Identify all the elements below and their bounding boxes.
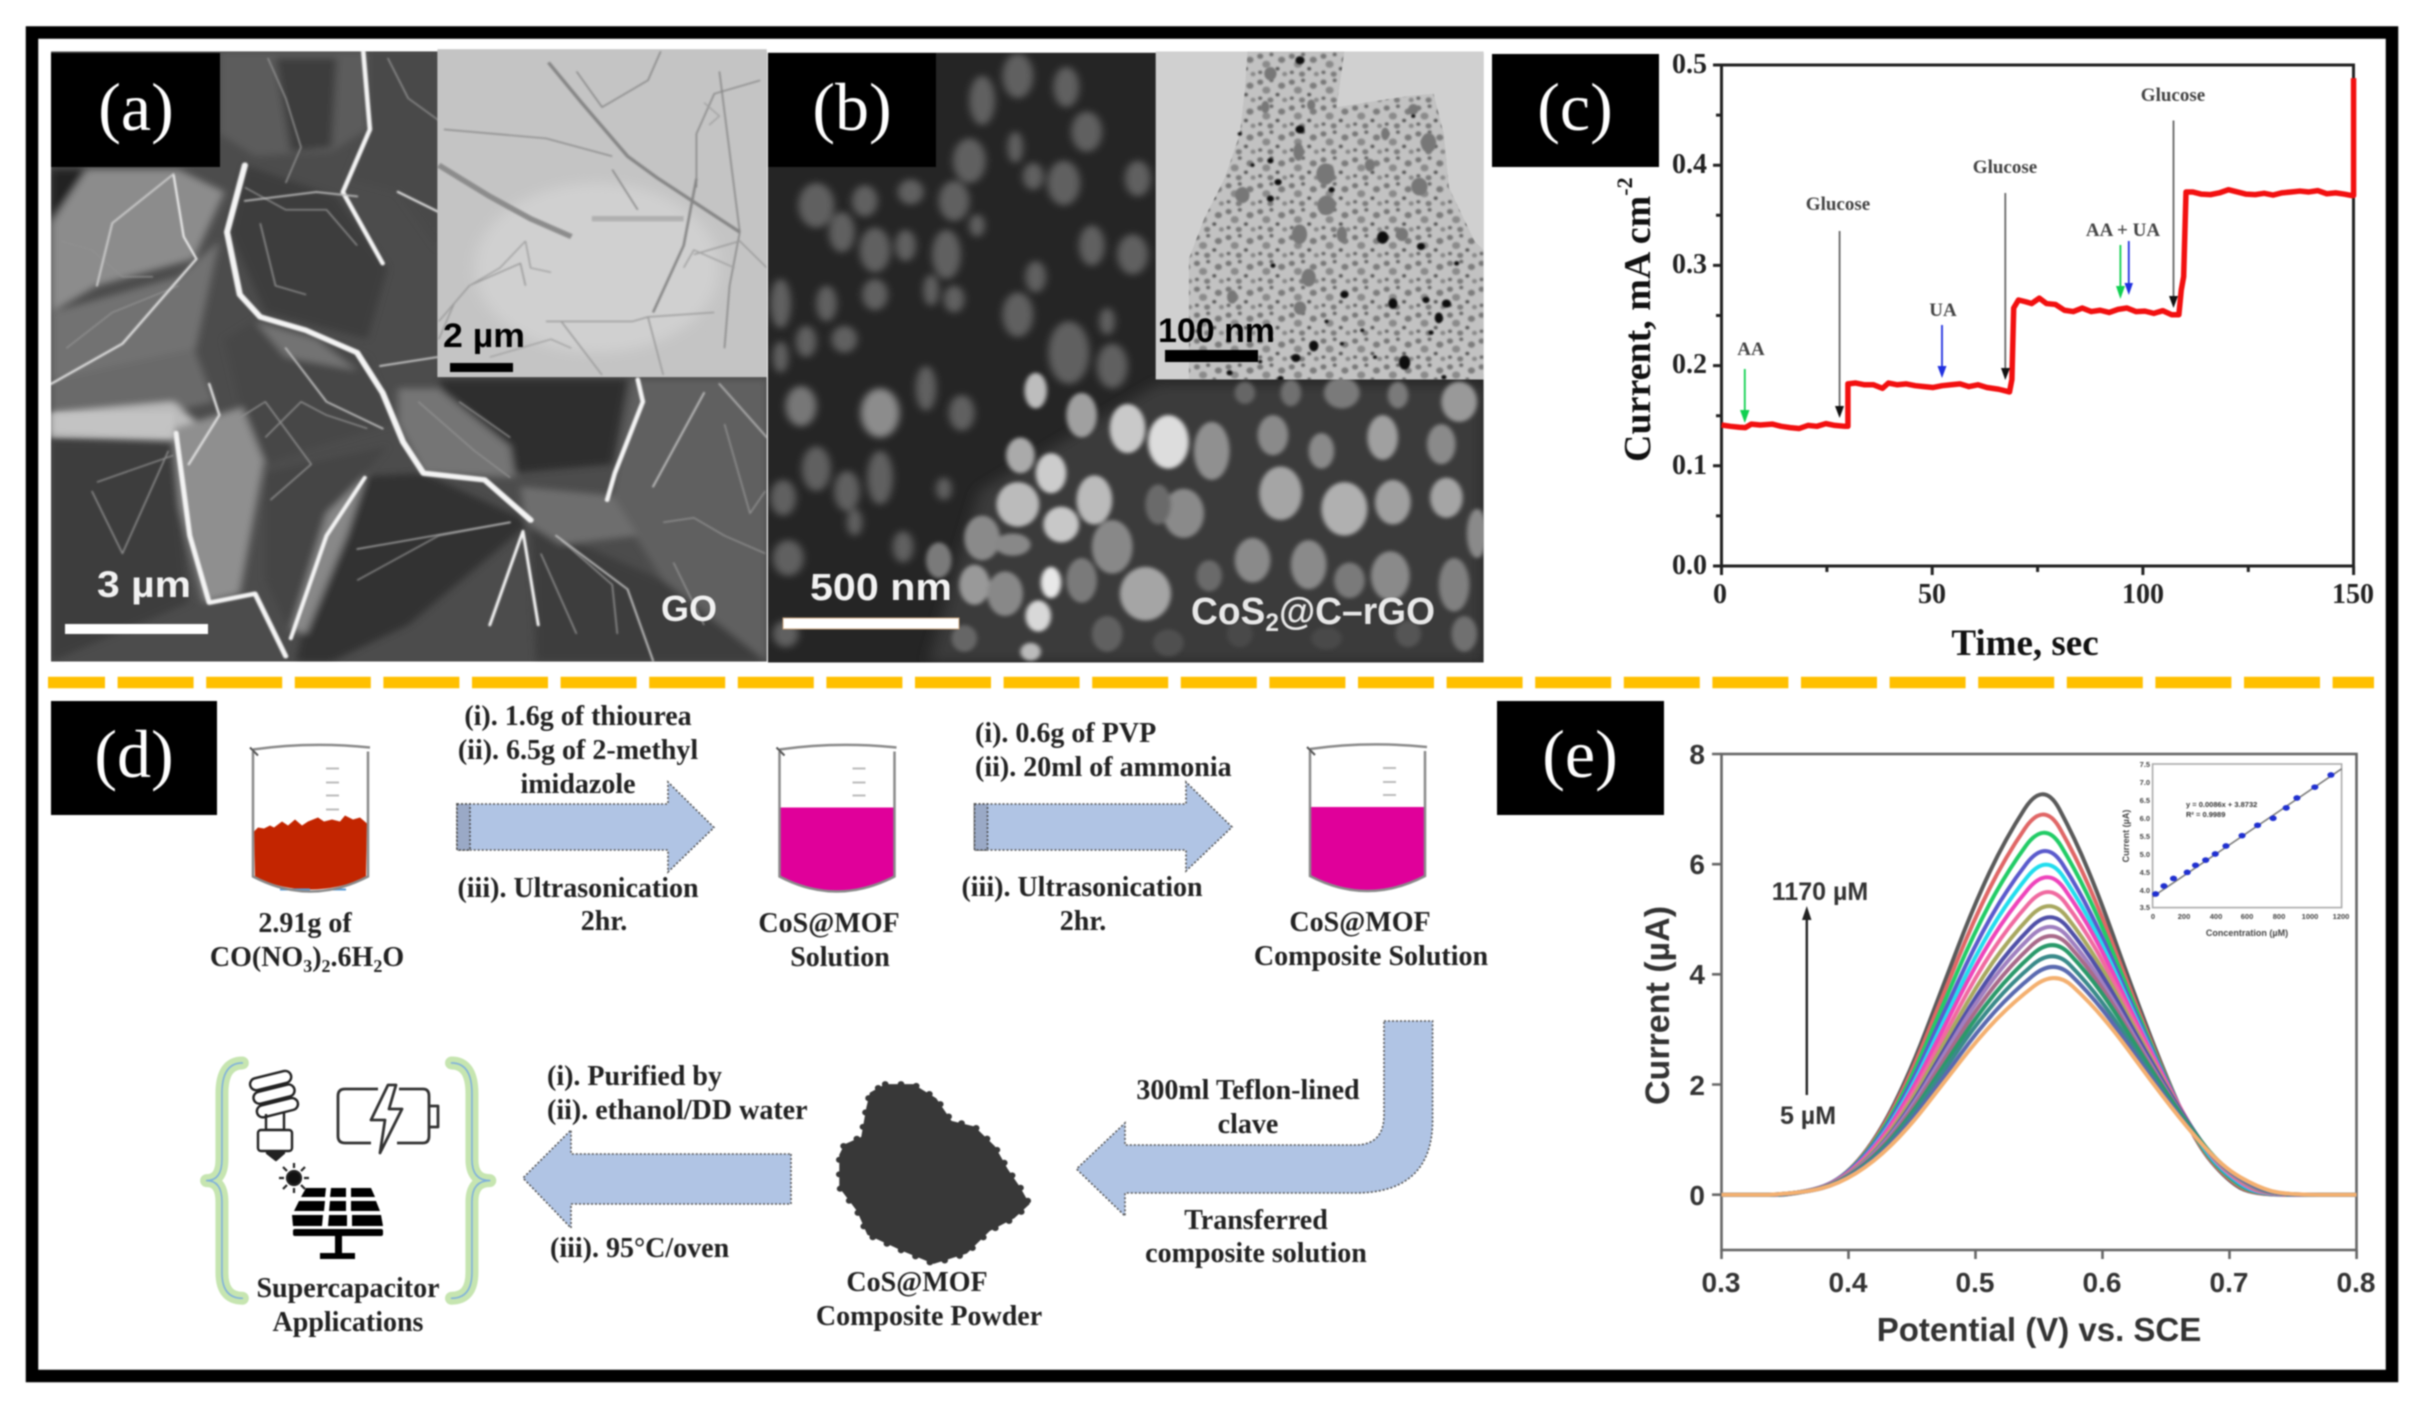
panel (d): synthesis flow diagram (51, 701, 1488, 1338)
x axis tick labels: 0.7 (2210, 1267, 2248, 1298)
y axis tick labels: 0.4 (1672, 149, 1707, 180)
purification text: (ii). ethanol/DD water (547, 1095, 808, 1126)
clave text: clave (1218, 1109, 1278, 1140)
y axis tick labels: 8 (1689, 739, 1705, 770)
beaker 1 caption: 2 (322, 956, 331, 976)
y axis tick labels: 0.0 (1672, 550, 1707, 581)
inset axis titles: Concentration (µM) (2206, 928, 2288, 938)
label (d): (d) (94, 716, 174, 792)
applications caption: Supercapacitor (256, 1273, 440, 1304)
SEM image of CoS2 particles (768, 53, 1487, 662)
inset x tick labels: 0 (2151, 912, 2155, 921)
step 1 reagents text: (ii). 6.5g of 2-methyl (458, 735, 698, 766)
inset x tick labels: 1200 (2333, 912, 2349, 921)
x axis tick labels: 0.6 (2083, 1267, 2121, 1298)
label (e): (e) (1542, 716, 1618, 792)
step 2 conditions text: 2hr. (1060, 906, 1106, 937)
beaker 2 caption: CoS@MOF (758, 908, 900, 939)
beaker 1 caption: 2 (373, 956, 382, 976)
inset y tick labels: 7.0 (2140, 778, 2150, 787)
y axis tick labels: 4 (1689, 959, 1705, 990)
beaker 2 with magenta solution (776, 745, 896, 892)
y axis tick labels: 0.5 (1672, 49, 1707, 80)
y axis title: Current, mA cm (1617, 196, 1659, 462)
bent arrow: transfer to clave (1076, 1021, 1433, 1216)
clave text: 300ml Teflon-lined (1136, 1075, 1360, 1106)
label (a): (a) (98, 69, 174, 145)
annotation labels: Glucose (2141, 85, 2205, 106)
concentration arrow and labels: 5 µM (1780, 1102, 1836, 1130)
x axis title: Potential (V) vs. SCE (1877, 1311, 2201, 1348)
beaker 1 with red cobalt nitrate (250, 745, 370, 892)
applications group (207, 1063, 490, 1338)
step 1 conditions text: 2hr. (581, 906, 627, 937)
beaker 3 with magenta solution (1307, 744, 1427, 891)
x axis tick labels: 0.4 (1829, 1267, 1868, 1298)
label (a) (51, 53, 220, 167)
concentration arrow and labels (1772, 878, 1868, 1130)
annotation labels: Glucose (1806, 194, 1870, 215)
step 2 reagents text: (i). 0.6g of PVP (975, 718, 1156, 749)
inset y tick labels: 6.0 (2140, 814, 2150, 823)
beaker 1 caption: 3 (303, 956, 312, 976)
arrow: step 2 (974, 782, 1232, 871)
axes and ticks (1712, 754, 2357, 1259)
beaker 1 caption: 2.91g of (258, 908, 352, 939)
inset trend line and points (2152, 769, 2342, 897)
inset x tick labels (2151, 912, 2349, 921)
annotation labels: AA + UA (2086, 220, 2160, 241)
step 1 conditions text (457, 873, 699, 937)
x axis title: Time, sec (1951, 623, 2099, 664)
panel (a): GO electron micrographs (51, 49, 767, 662)
step 1 reagents text (458, 701, 698, 800)
inset calibration plot (2121, 760, 2349, 938)
panel (b): CoS2@C-rGO electron micrographs (768, 51, 1487, 662)
inset x tick labels: 400 (2210, 912, 2222, 921)
inset y tick labels (2140, 760, 2150, 912)
y axis title: -2 (1612, 177, 1637, 196)
scale bar 500 nm (783, 567, 959, 629)
inset y tick labels: 6.5 (2140, 796, 2150, 805)
inset y tick labels: 4.5 (2140, 868, 2150, 877)
inset x tick labels: 200 (2178, 912, 2190, 921)
purification text (547, 1061, 808, 1126)
icon: battery (338, 1085, 438, 1153)
scale bar 3 um: 3 µm (97, 564, 191, 605)
scale bar 2 um: 2 µm (443, 317, 525, 355)
GO label: GO (661, 588, 717, 629)
applications caption: Applications (273, 1307, 424, 1338)
scale bar 3 um (65, 564, 208, 634)
inset x tick labels: 800 (2273, 912, 2285, 921)
clave text (1136, 1075, 1360, 1140)
powder caption (816, 1267, 1042, 1332)
x axis tick labels: 100 (2122, 579, 2164, 610)
transferred text (1145, 1205, 1367, 1269)
y axis tick labels: 0.3 (1672, 249, 1707, 280)
CoS2@C-rGO label: @C–rGO (1279, 591, 1435, 633)
beaker 3 caption: CoS@MOF (1289, 907, 1431, 938)
applications caption (256, 1273, 440, 1338)
step 1 conditions text: (iii). Ultrasonication (457, 873, 699, 904)
oven text: (iii). 95°C/oven (550, 1233, 730, 1264)
transferred text: Transferred (1184, 1205, 1328, 1236)
y axis title: Current (µA) (1639, 906, 1677, 1105)
beaker 1 caption: .6H (331, 942, 374, 973)
y axis tick labels: 0 (1689, 1180, 1705, 1211)
annotation labels: UA (1929, 300, 1957, 321)
panel (c): amperometric response chart (1492, 49, 2374, 664)
panel (e): voltammetry chart (1497, 701, 2415, 1348)
beaker 3 caption (1254, 907, 1488, 972)
beaker 1 caption (210, 908, 404, 976)
SEM image of GO sheets (51, 51, 767, 662)
inset y title: Current (µA) (2121, 810, 2131, 862)
curly braces (207, 1063, 490, 1298)
x axis tick labels: 150 (2332, 579, 2374, 610)
step 2 reagents text (975, 718, 1232, 783)
CoS2@C-rGO label: 2 (1265, 609, 1279, 637)
label (b) (768, 53, 936, 167)
label (e) (1497, 701, 1664, 815)
label (c): (c) (1537, 69, 1613, 145)
y axis tick labels (1672, 49, 1707, 581)
step 1 reagents text: (i). 1.6g of thiourea (464, 701, 692, 732)
powder caption: CoS@MOF (846, 1267, 988, 1298)
x axis tick labels: 0 (1713, 579, 1727, 610)
y axis tick labels: 0.1 (1672, 450, 1707, 481)
y axis tick labels (1689, 739, 1705, 1211)
step 1 reagents text: imidazole (520, 769, 636, 800)
step 2 conditions text: (iii). Ultrasonication (961, 872, 1203, 903)
beaker 1 caption: O (382, 942, 404, 973)
inset y tick labels: 5.5 (2140, 832, 2150, 841)
TEM inset of nanoparticles (1156, 51, 1484, 381)
label (c) (1492, 54, 1659, 167)
beaker 2 caption (758, 908, 900, 973)
arrow: step 1 (457, 782, 714, 872)
beaker 2 caption: Solution (790, 942, 890, 973)
y axis tick labels: 0.2 (1672, 349, 1707, 380)
current trace (1722, 78, 2354, 429)
arrow: purification (523, 1130, 791, 1228)
x axis tick labels: 50 (1918, 579, 1946, 610)
powder caption: Composite Powder (816, 1301, 1042, 1332)
y axis tick labels: 2 (1689, 1070, 1705, 1101)
annotation labels: Glucose (1973, 157, 2037, 178)
dashed yellow divider (48, 677, 2374, 688)
label (b): (b) (812, 69, 892, 145)
inset equation: R² = 0.9989 (2186, 810, 2225, 819)
step 2 conditions text (961, 872, 1203, 937)
purification text: (i). Purified by (547, 1061, 722, 1092)
CoS2@C-rGO label: CoS (1191, 591, 1267, 633)
axes and ticks (1713, 65, 2354, 575)
annotation arrows (1740, 120, 2178, 423)
x axis tick labels: 0.8 (2337, 1267, 2375, 1298)
TEM inset of GO (437, 49, 767, 377)
inset y tick labels: 7.5 (2140, 760, 2150, 769)
label (d) (51, 701, 217, 815)
inset y tick labels: 4.0 (2140, 886, 2150, 895)
transferred text: composite solution (1145, 1238, 1367, 1269)
icon: light bulb (249, 1070, 299, 1160)
icon: solar panel (292, 1188, 383, 1259)
inset x tick labels: 1000 (2302, 912, 2318, 921)
inset x tick labels: 600 (2241, 912, 2253, 921)
inset equation (2186, 800, 2257, 819)
scale bar 2 um (443, 317, 525, 372)
step 2 reagents text: (ii). 20ml of ammonia (975, 752, 1232, 783)
inset equation: y = 0.0086x + 3.8732 (2186, 800, 2257, 809)
inset y tick labels: 5.0 (2140, 850, 2150, 859)
beaker 3 caption: Composite Solution (1254, 941, 1488, 972)
x axis tick labels: 0.3 (1702, 1267, 1740, 1298)
powder blob (839, 1084, 1030, 1264)
x axis tick labels (1713, 579, 2374, 610)
annotation labels (1737, 85, 2205, 360)
concentration arrow and labels: 1170 µM (1772, 878, 1868, 906)
beaker 1 caption: ) (312, 942, 322, 973)
x axis tick labels (1702, 1267, 2375, 1298)
voltammogram curves (1720, 791, 2358, 1198)
scale bar 500 nm: 500 nm (810, 567, 952, 609)
annotation labels: AA (1737, 339, 1765, 360)
inset y tick labels: 3.5 (2140, 903, 2150, 912)
icon: sun (279, 1163, 309, 1193)
y axis tick labels: 6 (1689, 849, 1705, 880)
x axis tick labels: 0.5 (1956, 1267, 1994, 1298)
beaker 1 caption: CO(NO (210, 942, 303, 973)
scale bar 100 nm: 100 nm (1158, 312, 1275, 350)
